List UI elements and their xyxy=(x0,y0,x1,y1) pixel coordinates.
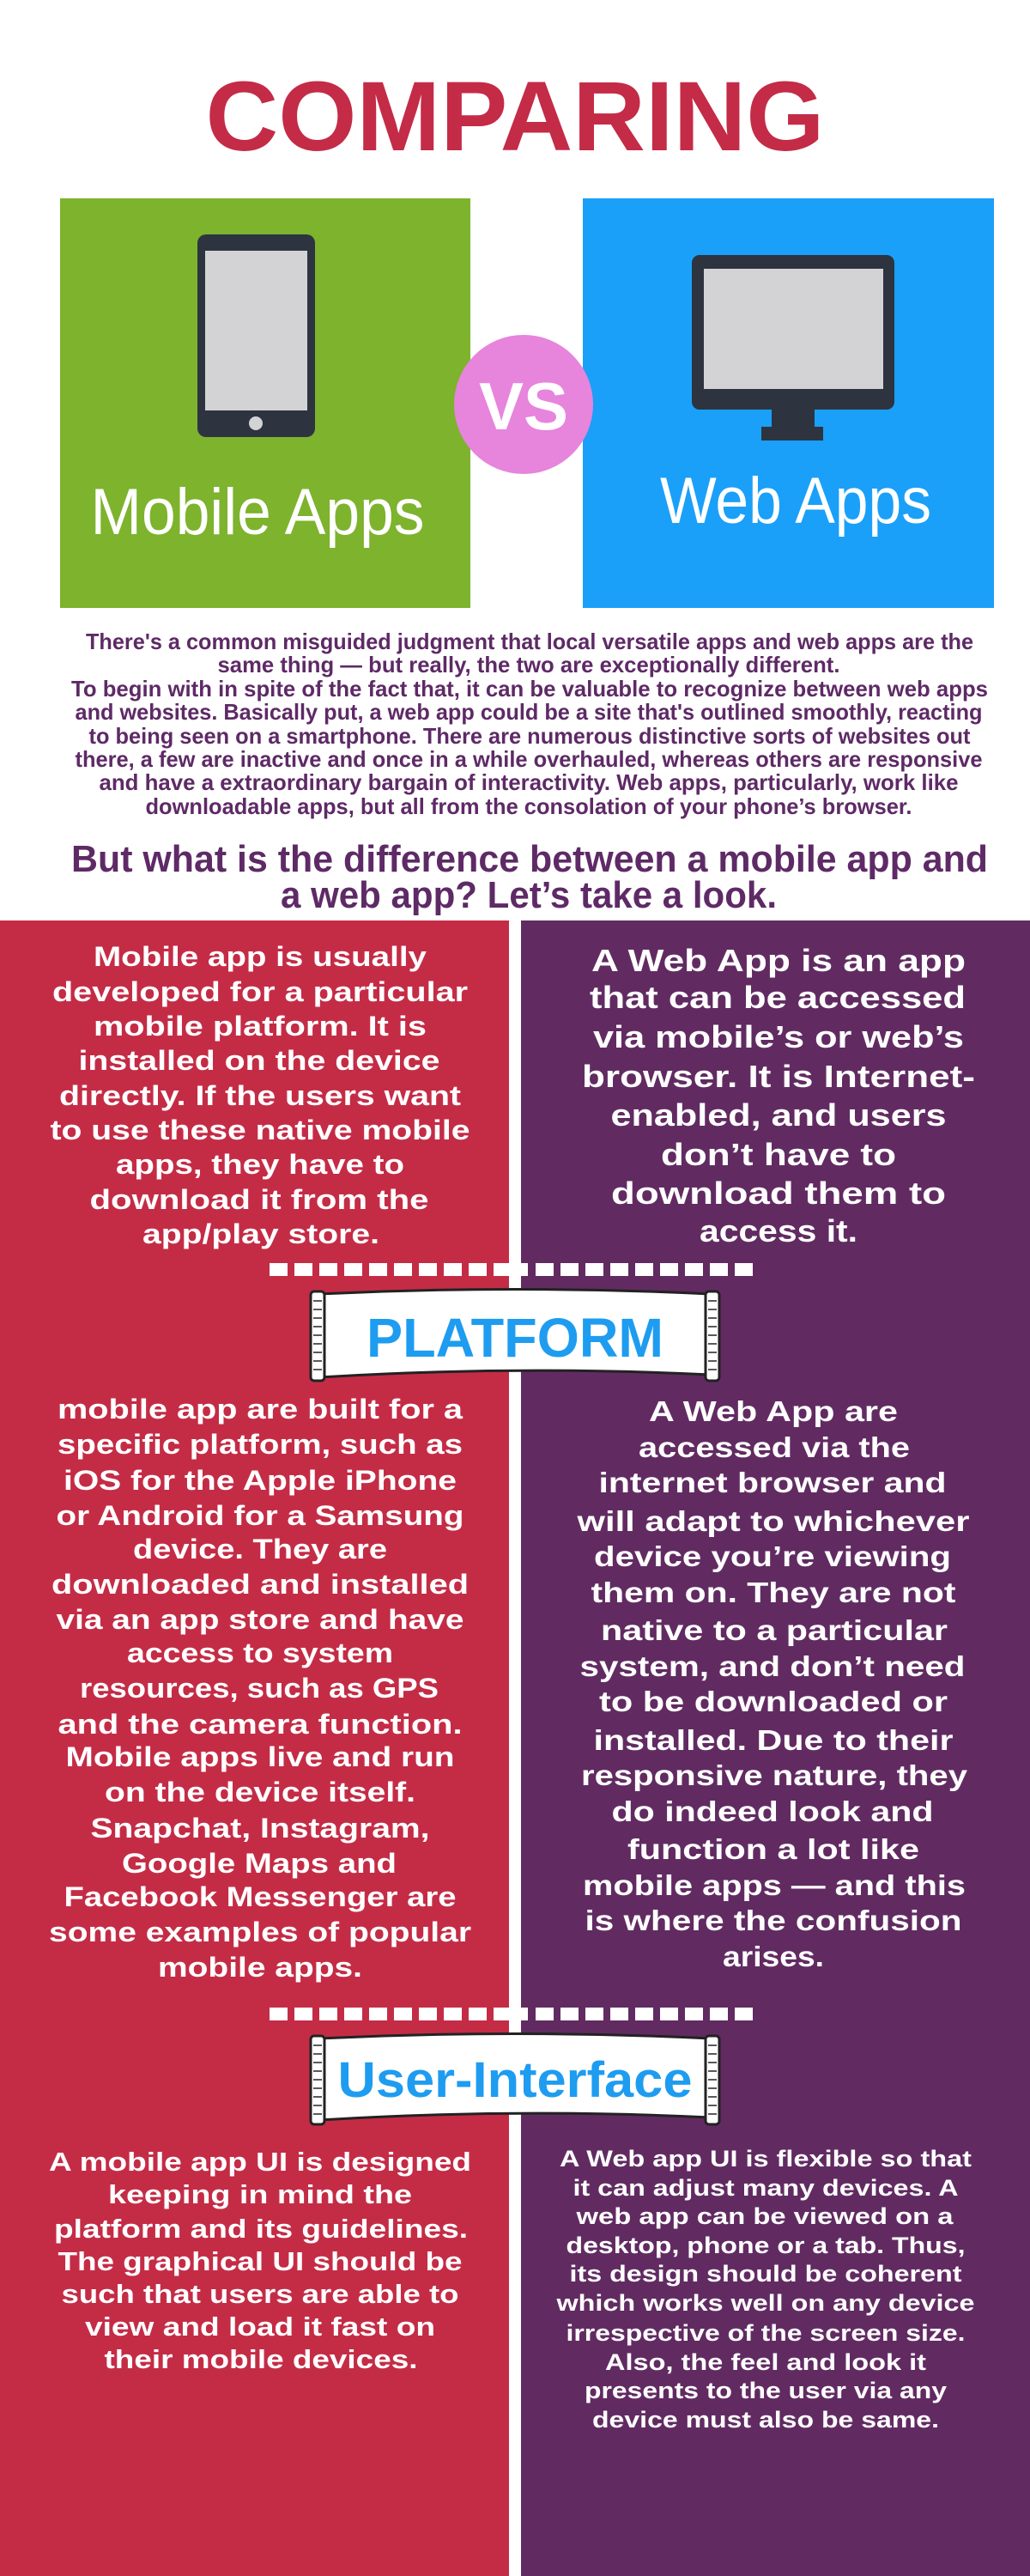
text: web app definition: download them to xyxy=(611,1176,946,1211)
text: mobile app definition xyxy=(50,941,470,1249)
text: mobile app definition: to use these native mobile xyxy=(50,1115,470,1145)
divider dashes 1 xyxy=(270,1263,753,1276)
text: mobile platform: resources, such as GPS xyxy=(80,1673,439,1704)
text: web platform: mobile apps — and this xyxy=(583,1869,966,1901)
text: mobile platform: downloaded and installed xyxy=(52,1569,469,1600)
text: web app definition: don’t have to xyxy=(661,1137,896,1172)
text: mobile app definition: directly. If the users want xyxy=(59,1080,461,1111)
panel: web column background xyxy=(521,920,1030,2576)
text: mobile app definition: app/play store. xyxy=(142,1218,379,1249)
heading: question xyxy=(71,838,988,916)
text: mobile app definition: apps, they have to xyxy=(116,1149,404,1180)
text: mobile platform: or Android for a Samsung xyxy=(57,1500,464,1531)
text: mobile app definition: installed on the device xyxy=(79,1045,439,1076)
text: web app definition: via mobile’s or web’s xyxy=(593,1019,964,1054)
text: web platform: device you’re viewing xyxy=(594,1540,951,1572)
intro text: there, a few are inactive and once in a while overhauled, whereas others are responsive xyxy=(76,746,982,772)
panel: web apps hero: Web Apps xyxy=(660,465,931,538)
intro text: downloadable apps, but all from the consolation of your phone’s browser. xyxy=(146,793,912,819)
text: web platform: native to a particular xyxy=(601,1614,948,1646)
intro text: and have a extraordinary bargain of interactivity. Web apps, particularly, work like xyxy=(100,769,958,795)
intro text: There's a common misguided judgment that local versatile apps and web apps are the xyxy=(86,629,973,654)
text: web app definition: browser. It is Internet- xyxy=(582,1059,975,1094)
text: mobile app definition: mobile platform. It is xyxy=(94,1011,427,1042)
text: web UI: its design should be coherent xyxy=(570,2261,961,2287)
text: mobile platform: and the camera function. xyxy=(58,1709,462,1740)
panel: mobile column background xyxy=(0,920,509,2576)
intro text: same thing — but really, the two are exceptionally different. xyxy=(218,652,839,677)
text: web UI xyxy=(555,2146,975,2433)
text: web platform: function a lot like xyxy=(627,1833,919,1865)
text: web app definition xyxy=(582,943,975,1249)
heading: question: a web app? Let’s take a look. xyxy=(281,874,777,916)
text: mobile platform: device. They are xyxy=(133,1534,387,1564)
text: web platform: them on. They are not xyxy=(591,1577,956,1608)
panel: mobile apps hero: Mobile Apps xyxy=(91,476,424,549)
text: mobile app definition: Mobile app is usually xyxy=(94,941,427,972)
intro text xyxy=(71,629,988,819)
text: web platform: accessed via the xyxy=(639,1431,910,1463)
text: mobile platform: mobile app are built for a xyxy=(58,1394,463,1425)
text: mobile platform: specific platform, such as xyxy=(58,1429,463,1460)
text: mobile platform: Facebook Messenger are xyxy=(64,1881,457,1912)
text: mobile app definition: download it from the xyxy=(89,1184,429,1215)
text: web platform: will adapt to whichever xyxy=(576,1505,970,1537)
text: web platform: A Web App are xyxy=(649,1395,898,1427)
text: web UI: which works well on any device xyxy=(555,2290,975,2316)
intro text: and websites. Basically put, a web app could be a site that's outlined smoothly, reacting xyxy=(76,699,982,725)
banner: platform: PLATFORM xyxy=(367,1307,663,1369)
banner: platform xyxy=(311,1290,719,1381)
text: web UI: Also, the feel and look it xyxy=(605,2349,926,2375)
text: web UI: A Web app UI is flexible so that xyxy=(560,2146,972,2172)
text: web app definition: access it. xyxy=(700,1213,857,1249)
text: web platform: arises. xyxy=(723,1941,824,1972)
heading: question: But what is the difference between a mobile app and xyxy=(71,838,988,880)
text: web UI: presents to the user via any xyxy=(585,2378,947,2403)
text: mobile UI: such that users are able to xyxy=(62,2279,458,2309)
icon: vs badge: VS xyxy=(479,368,568,444)
text: web app definition: that can be accessed xyxy=(590,980,966,1015)
intro text: to being seen on a smartphone. There are numerous distinctive sorts of websites out xyxy=(89,723,971,749)
banner: user-interface: User-Interface xyxy=(338,2052,692,2108)
text: web platform xyxy=(576,1395,970,1972)
text: mobile platform: Snapchat, Instagram, xyxy=(91,1813,429,1844)
text: mobile UI xyxy=(49,2147,471,2374)
text: mobile platform: on the device itself. xyxy=(105,1777,415,1807)
text: web platform: do indeed look and xyxy=(611,1795,934,1827)
text: mobile platform: some examples of popular xyxy=(49,1917,471,1947)
text: web app definition: A Web App is an app xyxy=(591,943,966,978)
text: mobile UI: view and load it fast on xyxy=(85,2312,435,2342)
text: mobile platform: Google Maps and xyxy=(122,1848,397,1879)
text: web platform: system, and don’t need xyxy=(580,1650,965,1682)
panel: web apps hero xyxy=(583,198,994,608)
text: mobile UI: A mobile app UI is designed xyxy=(49,2147,471,2177)
text: mobile platform: access to system xyxy=(127,1637,393,1668)
text: web platform: to be downloaded or xyxy=(599,1686,948,1717)
text: web platform: installed. Due to their xyxy=(594,1724,954,1756)
icon: smartphone xyxy=(197,234,315,437)
text: mobile platform: via an app store and have xyxy=(57,1604,464,1635)
text: web platform: internet browser and xyxy=(599,1467,946,1498)
text: mobile app definition: developed for a particular xyxy=(52,976,468,1007)
text: web UI: device must also be same. xyxy=(592,2407,939,2433)
text: web platform: responsive nature, they xyxy=(581,1759,968,1791)
title: COMPARING xyxy=(206,62,824,172)
text: web UI: web app can be viewed on a xyxy=(575,2203,954,2229)
banner: user-interface xyxy=(311,2033,719,2124)
text: mobile UI: The graphical UI should be xyxy=(58,2246,462,2276)
intro text: To begin with in spite of the fact that, it can be valuable to recognize between web apps xyxy=(71,676,988,702)
text: web platform: is where the confusion xyxy=(585,1905,961,1936)
text: mobile UI: their mobile devices. xyxy=(105,2344,418,2374)
text: mobile platform: mobile apps. xyxy=(158,1952,362,1983)
text: web UI: desktop, phone or a tab. Thus, xyxy=(566,2233,965,2258)
text: web UI: it can adjust many devices. A xyxy=(573,2175,958,2201)
text: mobile platform: Mobile apps live and run xyxy=(65,1741,455,1772)
icon: monitor xyxy=(692,255,894,440)
text: mobile UI: platform and its guidelines. xyxy=(54,2214,468,2244)
text: mobile platform: iOS for the Apple iPhone xyxy=(64,1465,457,1496)
icon: vs badge xyxy=(454,335,593,474)
text: web app definition: enabled, and users xyxy=(611,1097,946,1133)
panel: mobile apps hero xyxy=(60,198,470,608)
divider dashes 2 xyxy=(270,2008,753,2020)
text: mobile platform xyxy=(49,1394,471,1983)
text: mobile UI: keeping in mind the xyxy=(108,2179,412,2209)
text: web UI: irrespective of the screen size. xyxy=(566,2320,965,2346)
